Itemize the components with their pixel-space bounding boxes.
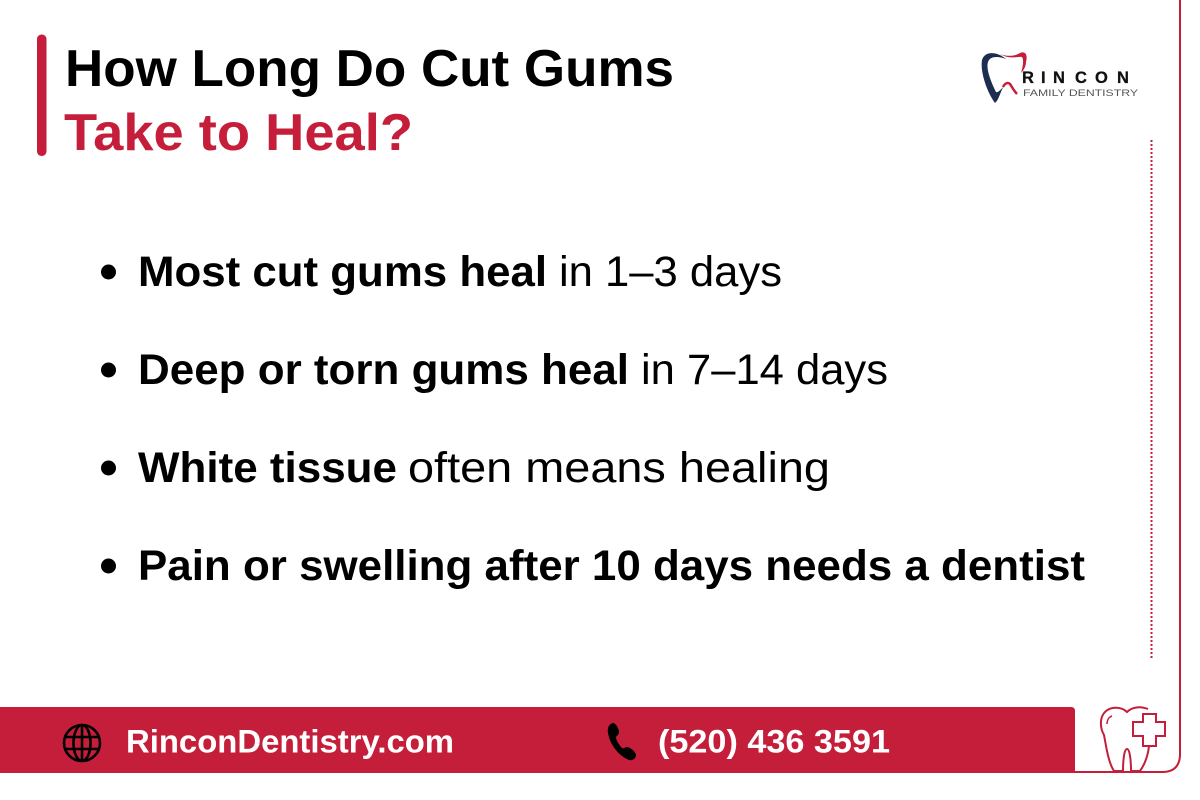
icon: tooth with cross bbox=[1101, 707, 1165, 771]
bullet: pain or swelling: Pain or swelling after 10 days needs a dentist bbox=[138, 542, 1085, 590]
bullet: deep or torn gums bbox=[101, 346, 888, 394]
bullet: most cut gums: Most cut gums heal bbox=[138, 248, 547, 296]
title: How Long Do Cut Gums bbox=[65, 40, 674, 98]
bullet: white tissue: White tissue bbox=[138, 444, 397, 492]
bullet: white tissue: often means healing bbox=[408, 444, 830, 492]
footer contact bar bbox=[0, 707, 1075, 773]
bullet: deep or torn gums: Deep or torn gums heal bbox=[138, 346, 629, 394]
bullet list bbox=[101, 248, 1085, 590]
logo: Rincon Family Dentistry bbox=[982, 52, 1139, 103]
icon: phone bbox=[608, 723, 636, 760]
logo: Rincon Family Dentistry: FAMILY DENTISTRY bbox=[1023, 88, 1139, 99]
title: Take to Heal? bbox=[64, 104, 413, 162]
bullet: white tissue bbox=[101, 444, 830, 492]
website: RinconDentistry.com bbox=[126, 724, 454, 760]
logo: Rincon Family Dentistry: RINCON bbox=[1022, 69, 1129, 87]
bullet: most cut gums: in 1–3 days bbox=[559, 248, 782, 296]
bullet: deep or torn gums: in 7–14 days bbox=[641, 346, 888, 394]
bullet: most cut gums bbox=[101, 248, 782, 296]
title accent bar bbox=[37, 34, 46, 156]
title bbox=[64, 40, 674, 162]
phone number: (520) 436 3591 bbox=[658, 724, 890, 760]
icon: globe bbox=[64, 725, 100, 761]
